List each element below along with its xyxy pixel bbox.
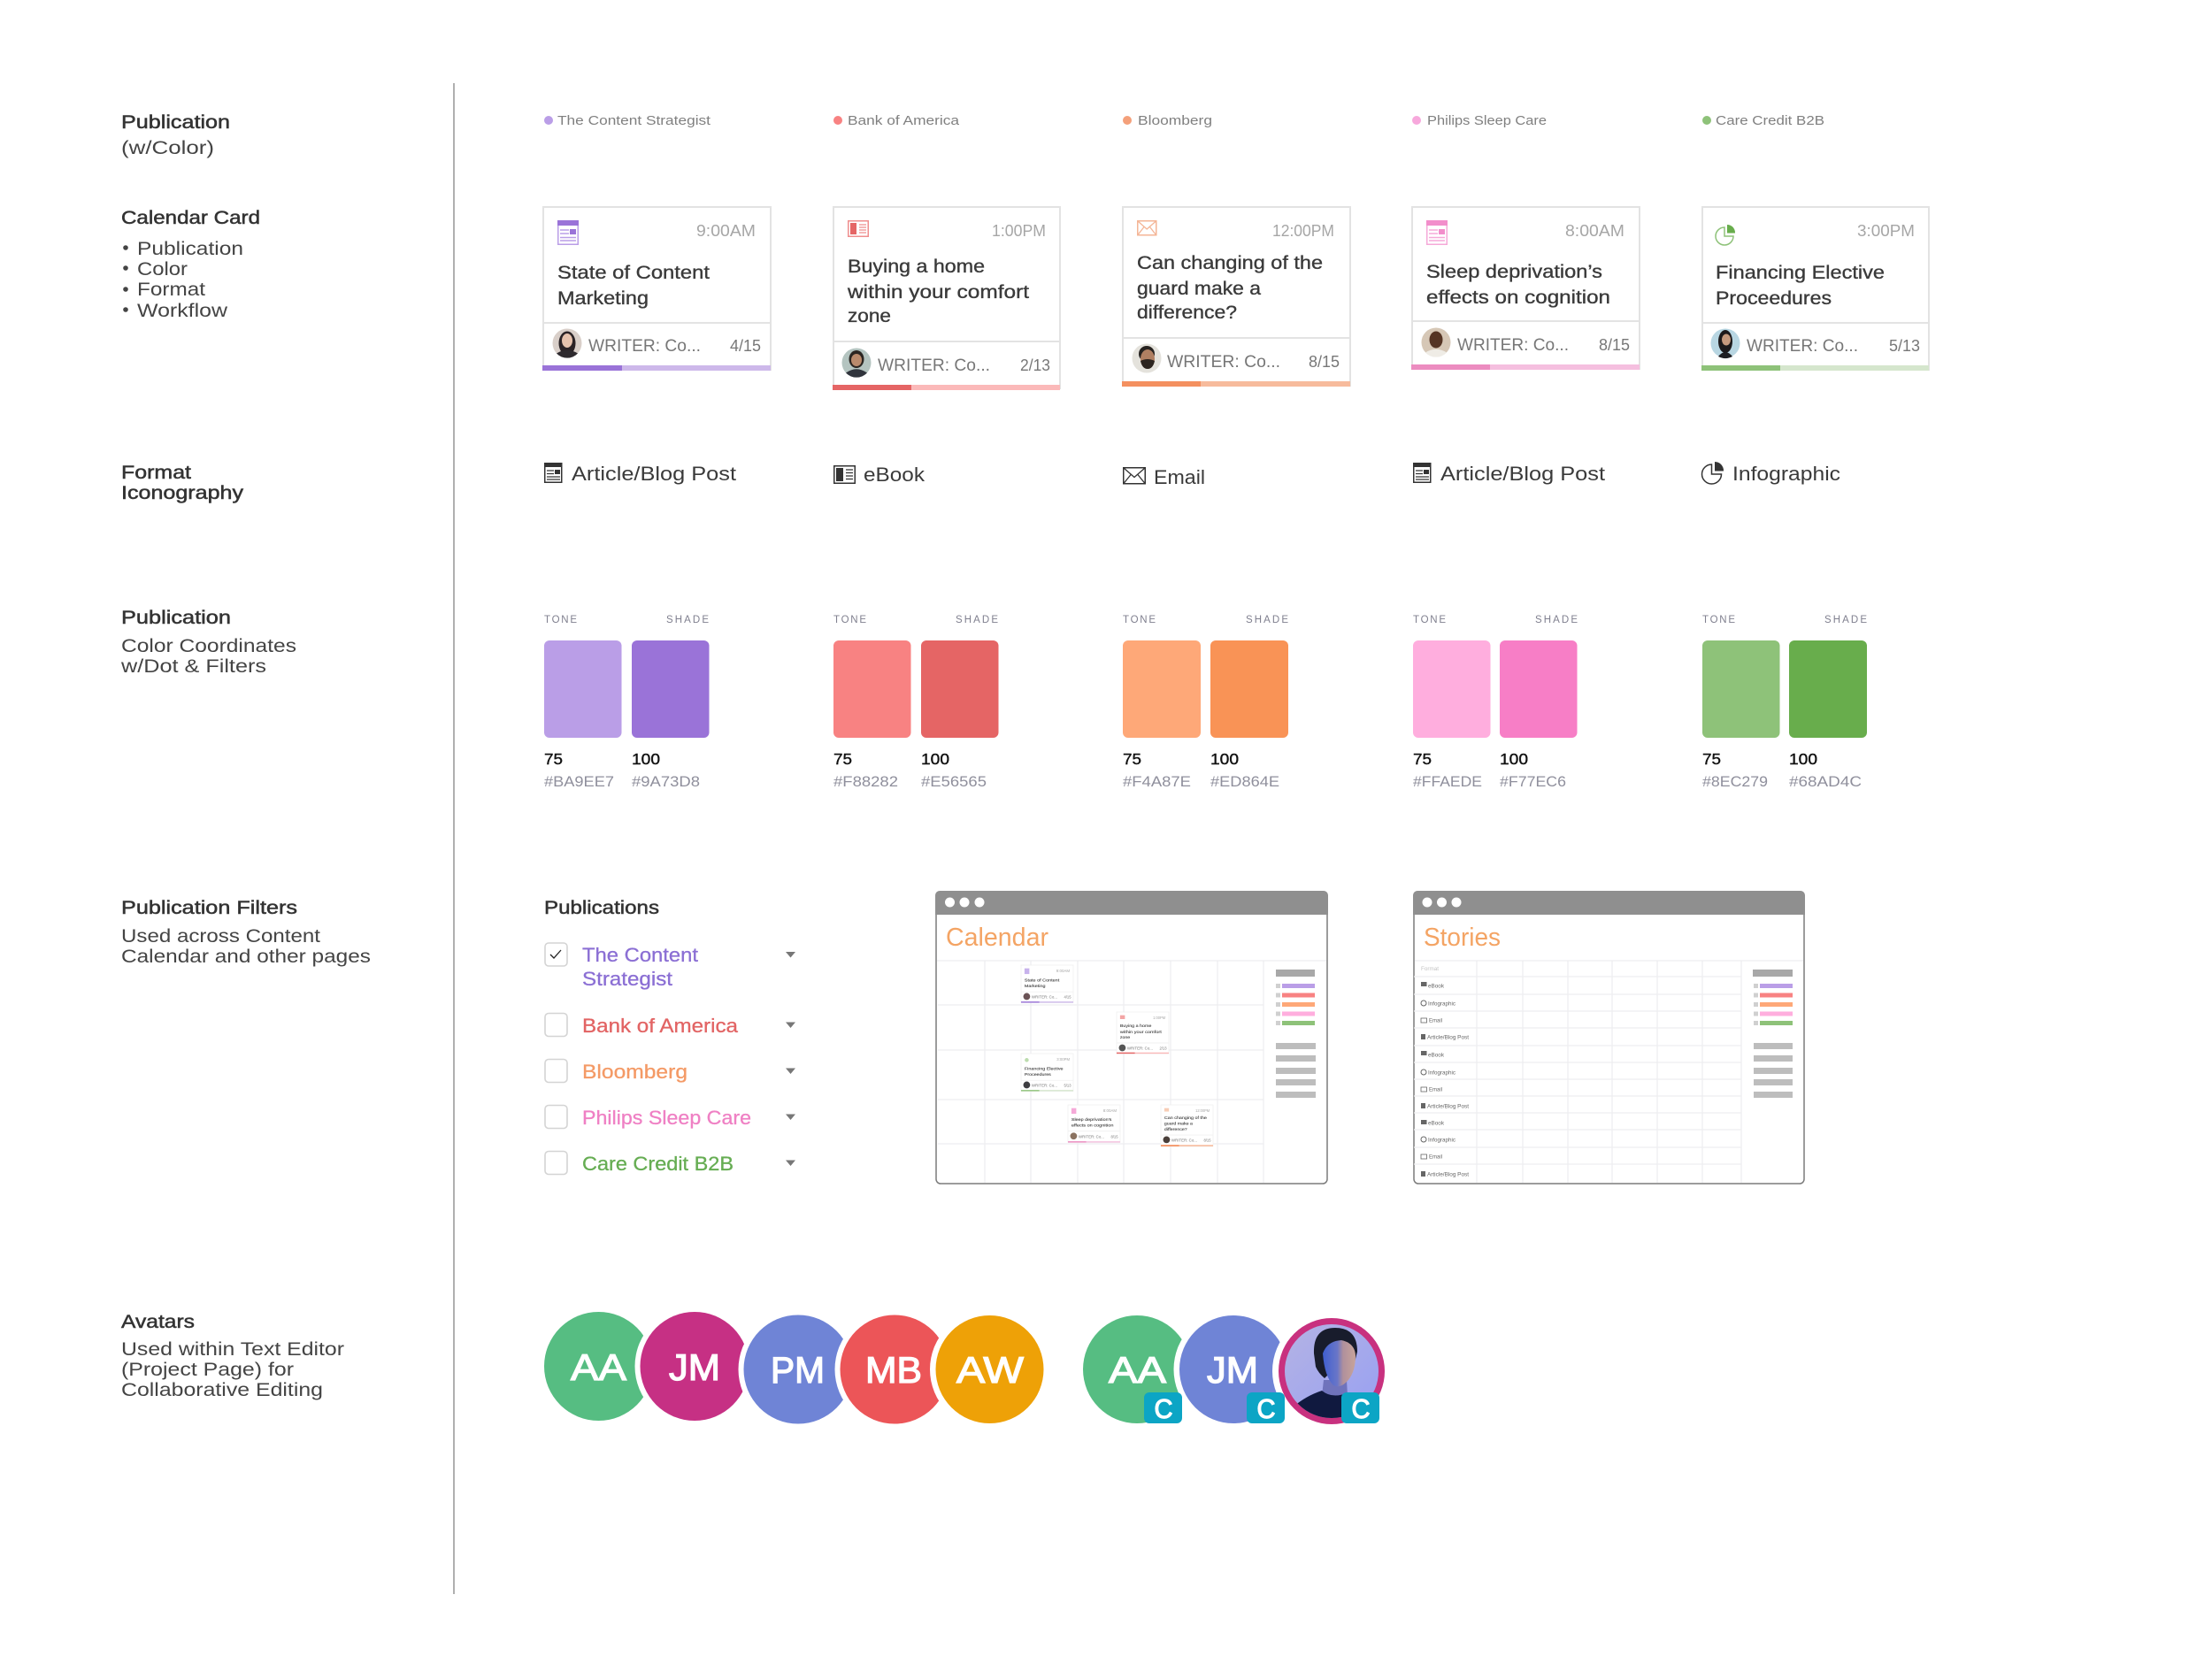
calendar card 5 [1701, 207, 1929, 371]
calendar card 3: 8/15 [1309, 353, 1340, 371]
calendar card 3: difference? [1137, 303, 1237, 323]
left label: Publication Filters: Publication Filters [121, 898, 297, 918]
swatches: The Content Strategist: SHADE [666, 615, 709, 625]
mini card: Buying a home: zone [1120, 1036, 1130, 1040]
mini card: Buying a home: within your comfort [1120, 1030, 1163, 1035]
swatches: Bloomberg: 75 [1123, 750, 1141, 768]
swatches: The Content Strategist: #BA9EE7 [544, 773, 614, 790]
filter: The Content Strategist (checked): The Content [582, 944, 698, 966]
swatches: The Content Strategist: #9A73D8 [632, 773, 700, 790]
left label: Calendar Card [121, 208, 260, 321]
mini card: Can changing of the guard: WRITER: Co... [1171, 1138, 1197, 1142]
format column rows: eBook [1428, 1053, 1445, 1058]
calendar card 2: 1:00PM [992, 222, 1046, 240]
icon: email [1124, 468, 1145, 484]
calendar card 2: Buying a home [848, 257, 985, 277]
filter: The Content Strategist (checked): Strategist [582, 968, 672, 990]
calendar card 4: Sleep deprivation’s [1426, 262, 1602, 282]
mini card: Buying a home: Buying a home [1120, 1024, 1152, 1029]
mini card: Financing Elective Proceedures: Proceedures [1025, 1072, 1052, 1077]
filter: Bank of America [545, 1014, 795, 1037]
calendar card 1: WRITER: Co... [588, 336, 701, 356]
swatches: Care Credit B2B: SHADE [1824, 615, 1867, 625]
swatches: Bloomberg: 100 [1210, 750, 1239, 768]
mini card: Sleep deprivation: 8/15 [1110, 1134, 1118, 1138]
mini card: Sleep deprivation: effects on cognition [1071, 1123, 1114, 1129]
swatches: Bloomberg [1123, 615, 1288, 790]
format column rows: Format [1421, 966, 1439, 972]
mini card: Can changing of the guard: guard make a [1164, 1122, 1193, 1127]
calendar card 5: 5/13 [1889, 337, 1920, 355]
window: Stories [1413, 891, 1805, 1184]
publication: The Content Strategist: The Content Strategist [557, 113, 711, 128]
format column rows: eBook [1428, 1120, 1445, 1127]
mini card: Financing Elective Proceedures [1021, 1054, 1073, 1092]
swatches: Care Credit B2B: #68AD4C [1789, 773, 1862, 790]
calendar card 4: effects on cognition [1426, 288, 1610, 308]
swatches: Bank of America: SHADE [956, 615, 998, 625]
left label: Publication Filters: Calendar and other pages [121, 947, 371, 967]
icon: ebook red [849, 221, 868, 236]
filter: The Content Strategist (checked) [545, 943, 795, 990]
calendar card 2: within your comfort [847, 282, 1029, 303]
badge: C on photo [1341, 1392, 1379, 1424]
avatar: man on beige [1421, 327, 1451, 357]
swatches: Philips Sleep Care: 100 [1500, 750, 1528, 768]
calendar card 5: WRITER: Co... [1747, 336, 1858, 356]
avatar: PM: PM [771, 1349, 825, 1391]
format: eBook [834, 464, 926, 486]
calendar card 5: Financing Elective [1716, 263, 1885, 283]
mini card: Sleep deprivation: Sleep deprivation’s [1071, 1117, 1112, 1123]
publication dots row [544, 113, 1824, 128]
swatches: Philips Sleep Care: #F77EC6 [1500, 773, 1566, 790]
icon: email orange [1138, 221, 1156, 235]
left label: Avatars: Used within Text Editor [121, 1339, 344, 1360]
left label: Avatars: Avatars [121, 1312, 195, 1332]
avatar: PM [738, 1309, 858, 1430]
window: Stories: Stories [1424, 924, 1501, 952]
avatar: woman with glasses [842, 349, 871, 378]
left label: Calendar Card: Color [137, 259, 188, 280]
format column rows: Email [1429, 1017, 1442, 1024]
mini card: Buying a home: WRITER: Co... [1127, 1046, 1153, 1051]
calendar card 1: 9:00AM [696, 222, 756, 240]
left label: Calendar Card: Publication [137, 239, 243, 259]
avatar: JM with badge [1173, 1309, 1294, 1430]
format: Article/Blog Post: Article/Blog Post [572, 463, 737, 485]
mini card: State of Content Marketing: State of Content [1025, 978, 1060, 984]
left label: Calendar Card: Calendar Card [121, 208, 260, 228]
calendar card 3: WRITER: Co... [1167, 352, 1280, 372]
format column rows: Email [1429, 1154, 1442, 1161]
mini card: Can changing of the guard [1161, 1105, 1213, 1146]
left label: Format Iconography [121, 463, 244, 503]
swatches: Bank of America: TONE [833, 615, 866, 625]
icon: article [1413, 463, 1432, 482]
format column rows: Infographic [1428, 1001, 1456, 1007]
mini card: Can changing of the guard: difference? [1164, 1127, 1187, 1132]
avatar: AA [544, 1312, 653, 1421]
swatches: The Content Strategist: 100 [632, 750, 660, 768]
filter: Philips Sleep Care [545, 1106, 795, 1129]
calendar card 4 [1411, 207, 1640, 370]
left label: Publication Color Coordinates: w/Dot & Filters [120, 656, 266, 677]
left label: Publication Color Coordinates: Publication [121, 608, 231, 628]
left label: Publication (w/Color): (w/Color) [121, 138, 214, 158]
swatches: Bloomberg: TONE [1123, 615, 1156, 625]
window: Calendar [935, 891, 1328, 1184]
mini card: Sleep deprivation [1068, 1105, 1120, 1143]
format column rows: Article/Blog Post [1427, 1104, 1469, 1109]
format column rows: Article/Blog Post [1427, 1035, 1469, 1040]
avatar: AW [930, 1309, 1049, 1430]
mini card: Financing Elective Proceedures: 5/13 [1064, 1084, 1071, 1088]
swatches: Philips Sleep Care: SHADE [1535, 615, 1578, 625]
avatar: bearded man [1133, 343, 1161, 373]
left label: Publication Color Coordinates [120, 608, 296, 677]
calendar card 1: Marketing [557, 288, 649, 309]
mini card: State of Content Marketing: 4/15 [1064, 995, 1071, 1000]
calendar card 3: guard make a [1137, 279, 1261, 299]
calendar card 3: 12:00PM [1272, 222, 1334, 240]
mini card: Buying a home [1117, 1012, 1169, 1054]
calendar card 2: WRITER: Co... [878, 356, 990, 375]
avatar: photo of woman [1272, 1318, 1385, 1424]
mini card: State of Content Marketing [1021, 965, 1073, 1003]
left label: Calendar Card: Workflow [137, 301, 228, 321]
calendar card 3: Can changing of the [1137, 253, 1323, 273]
filter: Care Credit B2B [545, 1152, 795, 1175]
badge: C on AA: C [1154, 1393, 1173, 1424]
icon: ebook [834, 466, 855, 483]
swatches: Care Credit B2B: #8EC279 [1702, 773, 1768, 790]
avatar: woman dark hair [552, 329, 582, 358]
left label: Avatars: (Project Page) for [121, 1360, 294, 1380]
swatches: Bloomberg: SHADE [1246, 615, 1288, 625]
window: Calendar: Calendar [946, 924, 1048, 952]
swatches: Care Credit B2B: TONE [1702, 615, 1735, 625]
calendar card 1: State of Content [557, 263, 710, 283]
mini card: Buying a home: 2/13 [1159, 1046, 1167, 1051]
publication: Bloomberg: Bloomberg [1138, 113, 1212, 128]
publication: Philips Sleep Care: Philips Sleep Care [1427, 113, 1547, 128]
calendar card 2: 2/13 [1020, 356, 1050, 374]
avatar: JM [635, 1307, 754, 1426]
mini card: Can changing of the guard: 8/15 [1203, 1138, 1211, 1142]
format column rows: Infographic [1428, 1070, 1456, 1076]
icon: article pink [1426, 220, 1448, 244]
left label: Format Iconography: Iconography [121, 483, 244, 503]
badge: C on photo: C [1352, 1393, 1370, 1424]
avatar: JM with badge: JM [1207, 1349, 1258, 1391]
swatches: Bank of America: 100 [921, 750, 949, 768]
badge: C on JM: C [1256, 1393, 1276, 1424]
avatar: MB [835, 1309, 954, 1430]
calendar card 1 [542, 207, 771, 371]
format: Article/Blog Post (second): Article/Blog Post [1440, 463, 1606, 485]
format: Infographic: Infographic [1732, 463, 1840, 485]
avatar: AW: AW [956, 1349, 1024, 1391]
filter: Bloomberg: Bloomberg [582, 1061, 687, 1083]
calendar card 2: zone [848, 306, 891, 326]
calendar card 2 [833, 207, 1060, 390]
calendar card 5: Proceedures [1716, 288, 1832, 309]
avatar: AA: AA [571, 1346, 626, 1388]
filter: Care Credit B2B: Care Credit B2B [582, 1153, 733, 1175]
calendar card 3 [1122, 207, 1350, 387]
swatches: Philips Sleep Care: 75 [1413, 750, 1432, 768]
mini card: Financing Elective Proceedures: WRITER: Co... [1032, 1084, 1057, 1088]
filter: Philips Sleep Care: Philips Sleep Care [582, 1107, 751, 1129]
format column rows: eBook [1428, 984, 1445, 989]
mini card: Buying a home: 1:00PM [1153, 1016, 1166, 1020]
swatches: Philips Sleep Care: #FFAEDE [1413, 773, 1482, 790]
calendar card 4: WRITER: Co... [1457, 335, 1569, 355]
left label: Publication Filters [121, 898, 371, 967]
mini card: Financing Elective Proceedures: 3:00PM [1056, 1057, 1071, 1062]
swatches: Philips Sleep Care [1413, 615, 1578, 790]
format: Infographic [1702, 462, 1840, 485]
format: Email [1124, 466, 1205, 488]
format column rows: Infographic [1428, 1138, 1456, 1143]
swatches: Care Credit B2B: 100 [1789, 750, 1817, 768]
format: Email: Email [1154, 466, 1205, 488]
badge: C on AA [1144, 1392, 1182, 1424]
filter: Bank of America: Bank of America [582, 1015, 739, 1037]
avatars group: commenting [1083, 1315, 1385, 1424]
icon: infographic green [1716, 225, 1735, 245]
left label: Publication Color Coordinates: Color Coordinates [121, 636, 296, 656]
calendar card 4: 8:00AM [1565, 222, 1624, 240]
badge: C on JM [1247, 1392, 1285, 1424]
swatches: The Content Strategist: TONE [544, 615, 577, 625]
swatches: Care Credit B2B: 75 [1702, 750, 1721, 768]
mini card: Can changing of the guard: 12:00PM [1195, 1108, 1210, 1113]
swatches: The Content Strategist: 75 [544, 750, 563, 768]
left label: Publication (w/Color) [121, 112, 230, 158]
format column rows [1421, 966, 1469, 1178]
left label: Format Iconography: Format [121, 463, 191, 483]
calendar card 1: 4/15 [730, 337, 761, 355]
swatches: The Content Strategist [544, 615, 710, 790]
format: eBook: eBook [864, 464, 926, 486]
left label: Avatars: Collaborative Editing [121, 1380, 323, 1400]
mini card: State of Content Marketing: WRITER: Co... [1032, 995, 1057, 1000]
mini filter sidebar [1753, 970, 1793, 1098]
publications filter list: Publications [544, 898, 659, 918]
swatches: Philips Sleep Care: TONE [1413, 615, 1446, 625]
mini card: State of Content Marketing: 9:00AM [1056, 969, 1071, 973]
publications filter list [544, 898, 795, 1175]
format column rows: Email [1429, 1086, 1442, 1093]
avatar: MB: MB [865, 1349, 922, 1391]
swatches: Bloomberg: #F4A87E [1123, 773, 1191, 790]
icon: article [544, 463, 563, 482]
avatar: AA with badge: AA [1109, 1349, 1166, 1391]
left label: Publication Filters: Used across Content [121, 926, 320, 947]
calendar card 4: 8/15 [1599, 336, 1630, 354]
swatches: Bank of America: #F88282 [833, 773, 898, 790]
mini card: Can changing of the guard: Can changing of the [1164, 1116, 1207, 1121]
icon: pie chart [1702, 462, 1724, 484]
swatches: Bloomberg: #ED864E [1210, 773, 1279, 790]
mini card: Sleep deprivation: WRITER: Co... [1079, 1134, 1104, 1138]
mini card: State of Content Marketing: Marketing [1025, 984, 1046, 989]
mini filter sidebar [1276, 970, 1316, 1098]
publication: Care Credit B2B: Care Credit B2B [1716, 113, 1824, 128]
format column rows: Article/Blog Post [1427, 1171, 1469, 1178]
swatches: Care Credit B2B [1702, 615, 1867, 790]
filter: Bloomberg [545, 1060, 795, 1083]
publication: Bank of America: Bank of America [848, 113, 960, 128]
swatches: Bank of America [833, 615, 998, 790]
swatches: Bank of America: 75 [833, 750, 852, 768]
left label: Publication (w/Color): Publication [121, 112, 230, 133]
swatches: Bank of America: #E56565 [921, 773, 987, 790]
avatars group: initials [544, 1307, 1049, 1430]
icon: article purple [557, 220, 579, 244]
left label: Calendar Card: Format [137, 280, 205, 300]
avatar: AA with badge [1083, 1315, 1191, 1423]
mini card: Sleep deprivation: 8:00AM [1103, 1108, 1118, 1113]
mini card: Financing Elective Proceedures: Financing Elective [1025, 1067, 1064, 1072]
avatar: woman dark hair blue background [1711, 329, 1740, 358]
calendar card 5: 3:00PM [1857, 222, 1915, 240]
left label: Avatars [121, 1312, 344, 1400]
avatar: JM: JM [669, 1346, 720, 1388]
